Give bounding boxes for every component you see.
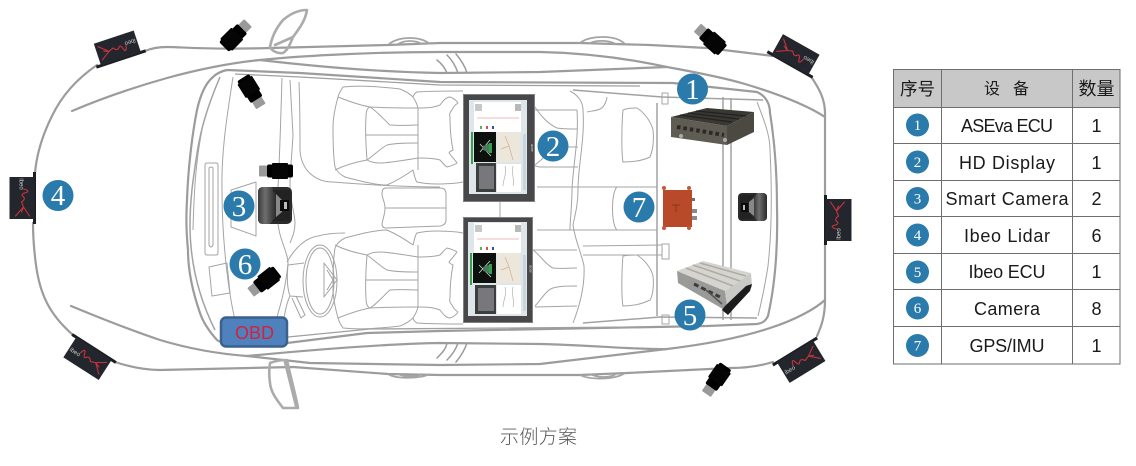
callout 2: 2 (546, 131, 560, 163)
table header (894, 70, 1120, 108)
callout 4 (42, 180, 74, 212)
row 5: Ibeo ECU (968, 262, 1046, 282)
callout 5 (674, 300, 706, 332)
callout 7: 7 (632, 192, 646, 224)
center console (382, 188, 500, 228)
callout 6: 6 (238, 249, 252, 281)
car body outline (33, 10, 825, 408)
OBD port label (221, 318, 287, 346)
smart camera front (258, 187, 292, 224)
table header: 设 (984, 80, 1000, 98)
callout 7 (624, 192, 654, 224)
steering wheel (283, 233, 345, 325)
row 7: 7 (914, 338, 922, 354)
rear seat upper (535, 91, 657, 323)
row 6: Camera (974, 299, 1041, 319)
row 3: Smart Camera (946, 189, 1069, 209)
lidar: front left (89, 29, 146, 69)
front seat passenger (333, 86, 463, 185)
camera: dash (259, 163, 293, 179)
windshield wiper lines (437, 54, 467, 362)
lidar: front: ibeo (18, 178, 24, 190)
rear cabin rails (573, 90, 771, 324)
rear seat lower (533, 245, 662, 307)
row 4 (906, 224, 1102, 246)
table header: 备 (1013, 80, 1029, 98)
lidar: front left: ibeo (123, 37, 136, 46)
row 4: Ibeo Lidar (964, 226, 1050, 246)
lidar: front (10, 172, 36, 224)
monitor 2 (463, 217, 534, 323)
row 3 (906, 187, 1102, 210)
row 5: 5 (914, 265, 921, 281)
front seat driver (333, 230, 463, 329)
GPS/IMU device (662, 186, 697, 230)
smart camera rear (738, 193, 767, 221)
camera: top left (218, 17, 254, 53)
table header: 序号 (900, 79, 935, 99)
row 2 (906, 150, 1102, 174)
row 5: 1 (1091, 262, 1102, 282)
lidar: rear left: ibeo (68, 347, 82, 359)
equipment table (894, 70, 1120, 364)
row 1: ASEva ECU (961, 116, 1053, 136)
lidar: rear (824, 195, 852, 245)
row 6 (906, 296, 1102, 320)
row 1: 1 (1091, 116, 1102, 136)
glovebox (209, 263, 230, 296)
lidar: rear right: ibeo (784, 365, 797, 376)
instrument trapezoid (231, 182, 256, 236)
callout 4: 4 (51, 180, 66, 212)
row 6: 6 (914, 301, 922, 317)
lidar: rear left (59, 333, 117, 383)
row 2: HD Display (959, 153, 1055, 173)
monitor 1 (463, 94, 535, 202)
camera: by label 6 (245, 265, 283, 299)
ASEva ECU device (671, 108, 754, 145)
callout 3 (224, 190, 254, 223)
row 3: 3 (914, 192, 921, 208)
caption: 示例方案 (500, 422, 577, 449)
wing mirror top (270, 10, 307, 53)
dashboard vent (205, 163, 218, 255)
wing mirror bottom (269, 360, 298, 408)
row 3: 2 (1091, 189, 1102, 209)
callout 3: 3 (232, 191, 246, 223)
callout 1 (677, 74, 708, 106)
row 4: 6 (1091, 226, 1102, 246)
table header: 数量 (1078, 79, 1114, 99)
callout 2 (538, 130, 568, 163)
camera: interior front (236, 73, 268, 111)
callout 5: 5 (683, 300, 697, 332)
camera: top right (692, 21, 728, 57)
row 4: 4 (914, 228, 922, 244)
row 1: 1 (914, 118, 921, 134)
row 1 (906, 114, 1102, 136)
lidar: rear right (772, 337, 830, 386)
row 7: 1 (1091, 336, 1102, 356)
car interior line art (190, 77, 771, 330)
roof antenna bumps (388, 37, 625, 379)
camera: bottom right (699, 361, 733, 399)
callout 1: 1 (685, 74, 700, 106)
lidar: rear: ibeo (836, 228, 842, 240)
callout 6 (230, 248, 260, 281)
row 7 (906, 334, 1102, 357)
row 2: 2 (914, 155, 921, 171)
row 2: 1 (1091, 153, 1102, 173)
OBD port label: OBD (235, 323, 274, 343)
row 6: 8 (1091, 299, 1102, 319)
monitor 2: acer (528, 265, 534, 274)
lidar: front right: ibeo (802, 53, 815, 65)
Ibeo ECU device (677, 261, 752, 315)
lidar: front right (767, 32, 824, 79)
row 7: GPS/IMU (970, 336, 1044, 356)
monitor 1: acer (530, 144, 535, 153)
row 5 (906, 260, 1102, 284)
